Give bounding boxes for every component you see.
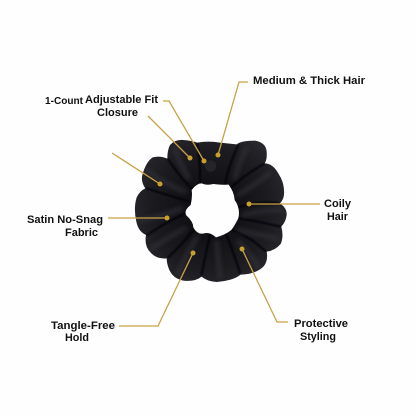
callout: satin no-snag fabric [27,214,170,239]
callout: coily hair: Coily [324,198,352,210]
closure button [205,160,216,172]
callout: tangle-free hold: Hold [65,332,89,344]
callout: pointer without label [112,153,162,186]
scrunchie [135,140,287,282]
callout: adjustable fit closure [85,94,206,164]
callout: satin no-snag fabric: Satin No-Snag [27,214,103,226]
callout: adjustable fit closure: Adjustable Fit [85,94,158,106]
callout: coily hair: Hair [327,211,349,223]
callout: 1-count [45,96,192,160]
callout: tangle-free hold [51,250,196,344]
callout: medium and thick hair: Medium & Thick Hair [253,75,366,87]
callout: protective styling: Protective [294,318,348,330]
callout: medium and thick hair [216,75,366,158]
callout: protective styling [240,246,348,343]
infographic [27,76,365,342]
callout: coily hair [246,198,352,223]
satin folds [140,144,282,277]
callout: 1-count: 1-Count [45,96,84,107]
callout: tangle-free hold: Tangle-Free [51,320,115,332]
callout: satin no-snag fabric: Fabric [65,227,98,239]
callout: adjustable fit closure: Closure [97,107,138,119]
callout: protective styling: Styling [300,331,336,343]
